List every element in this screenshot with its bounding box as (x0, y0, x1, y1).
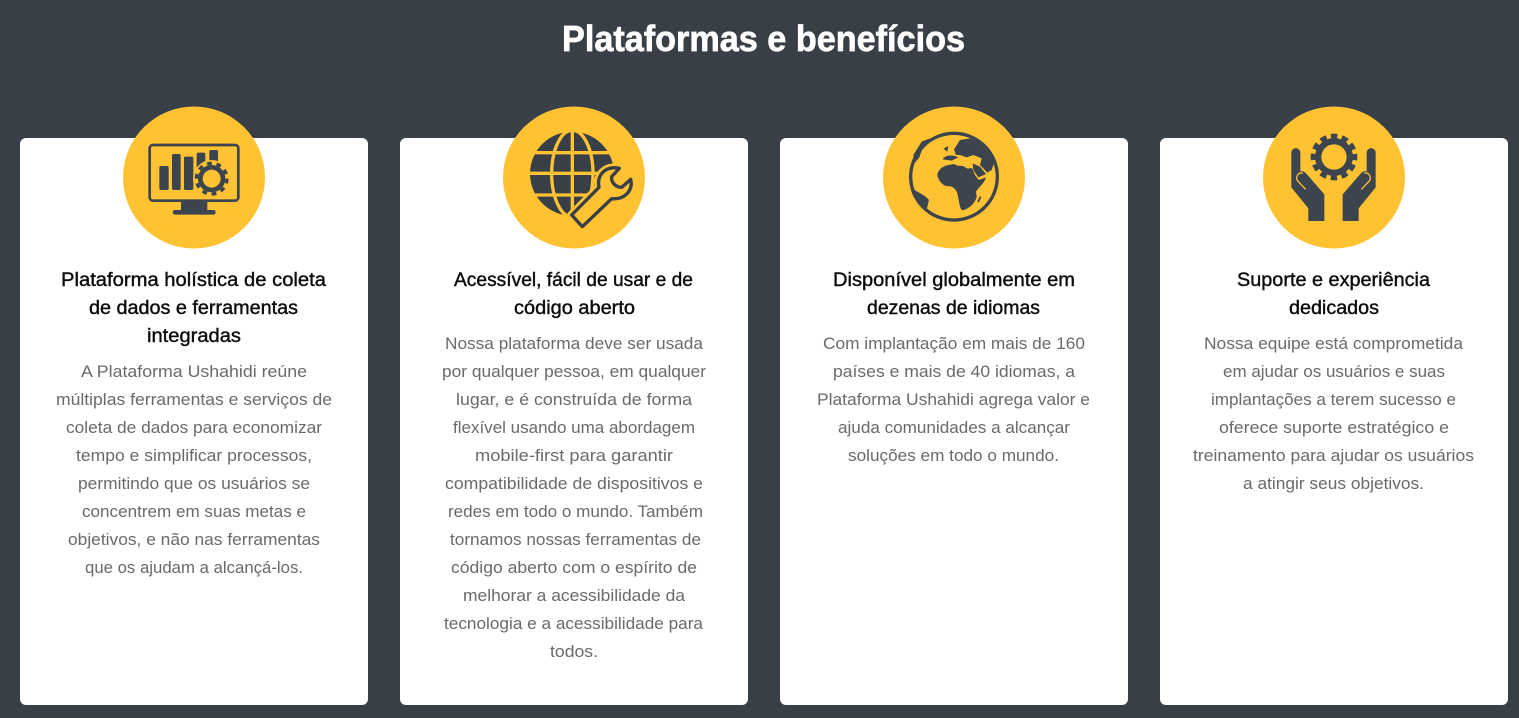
card body text: Plataforma Ushahidi agrega valor e (817, 390, 1090, 409)
card body text: permitindo que os usuários se (78, 474, 310, 493)
card body text: ajuda comunidades a alcançar (838, 418, 1070, 437)
card body text: países e mais de 40 idiomas, a (833, 362, 1076, 381)
card heading: código aberto (514, 298, 635, 319)
card body text: a atingir seus objetivos. (1243, 474, 1424, 493)
card body text: melhorar a acessibilidade da (463, 586, 686, 605)
card body text: oferece suporte estratégico e (1219, 418, 1449, 437)
card background (1160, 138, 1508, 705)
card background (400, 138, 748, 705)
panel: accessible and open source (400, 106, 748, 705)
card body text: Nossa equipe está comprometida (1204, 334, 1464, 353)
card heading: Disponível globalmente em (833, 270, 1075, 291)
card body text: implantações a terem sucesso e (1211, 390, 1456, 409)
card body text: redes em todo o mundo. Também (448, 502, 703, 521)
card background (780, 138, 1128, 705)
title: Plataformas e benefícios (562, 18, 965, 59)
card heading: Suporte e experiência (1237, 270, 1430, 291)
card body text: compatibilidade de dispositivos e (445, 474, 703, 493)
card background (20, 138, 368, 705)
card body text (817, 334, 1090, 465)
card body text: concentrem em suas metas e (82, 502, 306, 521)
card heading (833, 270, 1075, 319)
card body text: Com implantação em mais de 160 (823, 334, 1085, 353)
card body text: soluções em todo o mundo. (848, 446, 1059, 465)
card heading: Acessível, fácil de usar e de (454, 270, 693, 291)
card body text (1193, 334, 1474, 493)
card body text: objetivos, e não nas ferramentas (68, 530, 320, 549)
card heading (454, 270, 693, 319)
card heading: integradas (147, 326, 241, 347)
icon: hands holding gear (1263, 106, 1405, 248)
card body text: Nossa plataforma deve ser usada (445, 334, 704, 353)
card body text: tecnologia e a acessibilidade para (444, 614, 704, 633)
card body text: todos. (550, 642, 598, 661)
card body text: tempo e simplificar processos, (76, 446, 312, 465)
card heading (61, 270, 326, 347)
card heading: dezenas de idiomas (867, 298, 1040, 319)
panel: globally available (780, 106, 1128, 705)
card body text: múltiplas ferramentas e serviços de (56, 390, 332, 409)
card heading: de dados e ferramentas (89, 298, 298, 319)
card body text: flexível usando uma abordagem (453, 418, 695, 437)
card body text: coleta de dados para economizar (66, 418, 322, 437)
card body text: que os ajudam a alcançá-los. (85, 558, 303, 577)
card body text: em ajudar os usuários e suas (1223, 362, 1445, 381)
panel: holistic platform (20, 106, 368, 705)
card body text: treinamento para ajudar os usuários (1193, 446, 1474, 465)
card body text (56, 362, 332, 577)
icon: monitor with chart and gear (123, 106, 265, 248)
icon: earth (883, 106, 1025, 248)
icon: globe with wrench (503, 106, 645, 248)
card body text (442, 334, 706, 661)
panel: dedicated support (1160, 106, 1508, 705)
card body text: lugar, e é construída de forma (456, 390, 693, 409)
card heading: dedicados (1289, 298, 1379, 319)
card body text: mobile-first para garantir (475, 446, 673, 465)
card body text: tornamos nossas ferramentas de (450, 530, 701, 549)
card body text: código aberto com o espírito de (451, 558, 697, 577)
card heading (1237, 270, 1430, 319)
card body text: A Plataforma Ushahidi reúne (81, 362, 307, 381)
card heading: Plataforma holística de coleta (61, 270, 326, 291)
card body text: por qualquer pessoa, em qualquer (442, 362, 706, 381)
